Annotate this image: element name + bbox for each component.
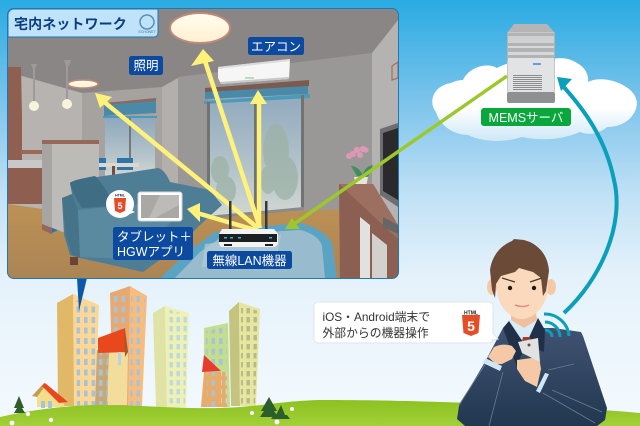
icon: HTML5 bubble: 5 <box>117 201 123 211</box>
lapels <box>503 318 545 367</box>
icon: HTML5 bubble: HTML <box>115 194 126 198</box>
plant <box>346 146 373 188</box>
brows <box>502 278 542 282</box>
man <box>457 239 607 426</box>
label: title box: ECHONET <box>138 30 156 34</box>
cabinet <box>339 184 398 278</box>
face <box>497 266 548 319</box>
cloud <box>432 58 637 141</box>
callout: device operation <box>314 302 498 343</box>
arrows: wifi to devices <box>95 49 267 230</box>
icon: tablet <box>138 192 182 221</box>
panel: room interior <box>7 8 399 288</box>
label: tablet + HGW app <box>113 227 193 260</box>
kitchen counter <box>8 160 42 204</box>
icon: HTML5 bubble <box>106 190 135 218</box>
back wall <box>178 53 372 228</box>
label: MEMS server: MEMSサーバ <box>489 111 563 125</box>
sofa <box>62 168 222 272</box>
callout: device operation: 外部からの機器操作 <box>322 326 429 340</box>
trees and flowers <box>10 396 294 425</box>
callout: device operation: iOS・Android端末で <box>322 310 430 324</box>
arrow: server to router <box>285 76 507 229</box>
right wall <box>372 20 398 235</box>
label: title box <box>8 9 158 37</box>
phone <box>518 338 540 362</box>
arrow to pendant lamp <box>95 93 258 228</box>
server tower <box>507 24 555 103</box>
arrow to tablet <box>187 203 255 230</box>
label: wireless LAN device: 無線LAN機器 <box>212 253 287 268</box>
dining table and chairs <box>99 158 139 175</box>
label: tablet + HGW app: タブレット＋ <box>117 229 192 244</box>
pointer from room to building <box>77 278 87 311</box>
air conditioner <box>218 59 290 84</box>
mouth <box>515 305 529 306</box>
left wall <box>8 72 82 213</box>
icon: wireless router <box>219 201 278 247</box>
floor <box>8 204 340 278</box>
label: MEMS server <box>481 108 571 126</box>
eyes <box>508 286 536 290</box>
big window <box>204 80 310 219</box>
pillar <box>42 140 99 234</box>
hair <box>490 239 549 298</box>
rug <box>160 223 337 278</box>
grass hill <box>0 400 640 426</box>
label: wireless LAN device <box>207 251 292 269</box>
tie <box>522 337 531 341</box>
label: title box: 宅内ネットワーク <box>14 16 127 32</box>
ceiling <box>8 9 398 93</box>
arrow to ceiling lamp <box>191 49 260 228</box>
label: lighting: 照明 <box>133 59 159 73</box>
ears <box>487 279 556 295</box>
neck <box>511 305 537 328</box>
icon: HTML5: HTML <box>464 310 478 316</box>
label: lighting <box>129 56 163 75</box>
ceiling lamp small <box>68 80 98 88</box>
jacket <box>457 328 607 426</box>
glass table <box>202 235 281 267</box>
pendant lights <box>29 60 72 111</box>
corridor wall <box>82 87 162 177</box>
label: air conditioner: エアコン <box>251 40 301 54</box>
buildings <box>32 286 260 408</box>
icon: HTML5: 5 <box>467 318 475 334</box>
picture frame <box>392 62 398 80</box>
icon: wireless signal <box>544 314 569 337</box>
ceiling lamp large <box>170 13 230 43</box>
label: tablet + HGW app: HGWアプリ <box>117 245 185 259</box>
arrow: phone to server <box>557 77 617 313</box>
sleeve lines <box>459 363 602 426</box>
hands <box>488 345 516 364</box>
small window <box>103 98 157 178</box>
shirt <box>508 317 541 349</box>
icon: HTML5 <box>462 310 480 336</box>
label: air conditioner <box>248 37 304 55</box>
arrow to air conditioner <box>250 90 267 228</box>
cuffs <box>483 358 502 371</box>
TV <box>380 123 398 207</box>
